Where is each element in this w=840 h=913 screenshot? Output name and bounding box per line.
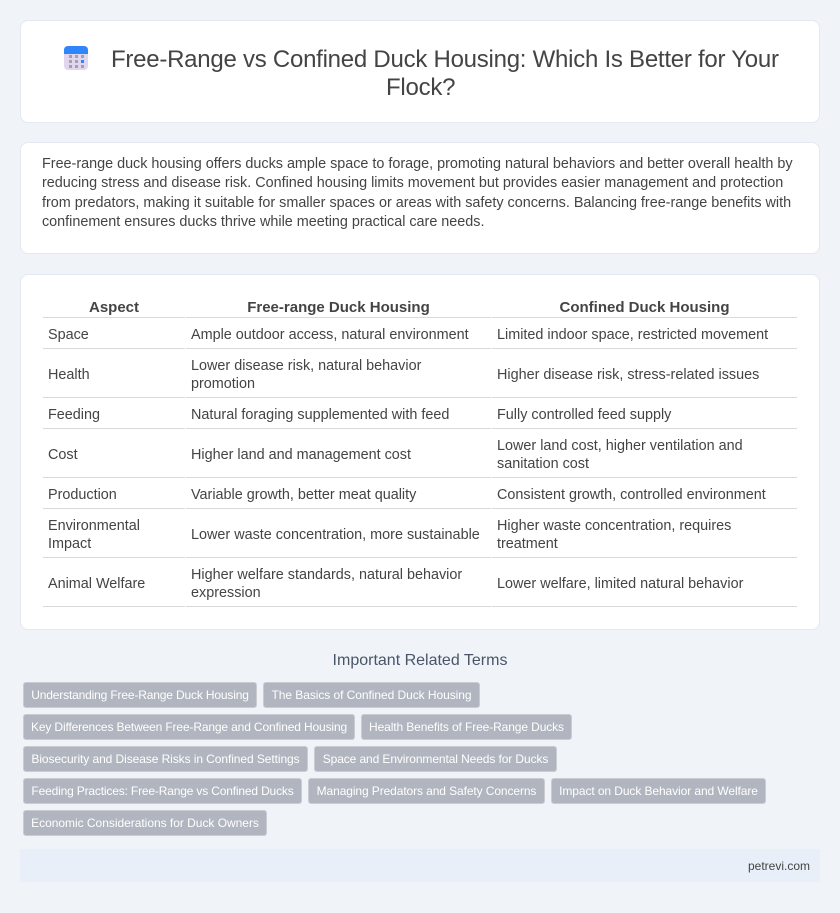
row: Animal Welfare: Animal Welfare: [48, 576, 145, 592]
tag: Economic Considerations for Duck Owners: [31, 816, 259, 830]
text block: intro paragraph: [42, 156, 793, 230]
tag: Understanding Free-Range Duck Housing: [31, 688, 249, 702]
row: Production: Consistent growth, controlled environment: [497, 487, 766, 503]
tag: [361, 714, 572, 740]
row: Environmental Impact: [48, 518, 731, 552]
tag: [23, 714, 355, 740]
row: Production: Variable growth, better meat quality: [191, 487, 416, 503]
tag: Impact on Duck Behavior and Welfare: [559, 784, 758, 798]
table: comparison: [43, 299, 797, 607]
title: [111, 46, 779, 101]
title: Flock?: [386, 74, 455, 101]
table header: Aspect: [89, 299, 139, 316]
tag: [551, 778, 766, 804]
title: Free-Range vs Confined Duck Housing: Which Is Better for Your: [111, 46, 779, 73]
row: Cost: Higher land and management cost: [191, 447, 411, 463]
row: Space: [48, 327, 768, 343]
tag: Managing Predators and Safety Concerns: [317, 784, 536, 798]
footer source: petrevi.com: [748, 859, 810, 873]
row: Animal Welfare: expression: [191, 585, 261, 601]
row: Environmental Impact: Environmental: [48, 518, 140, 534]
tag: Feeding Practices: Free-Range vs Confined Ducks: [31, 784, 294, 798]
row: Space: Limited indoor space, restricted movement: [497, 327, 768, 343]
tag list: related terms: [23, 682, 766, 836]
row: Cost: Lower land cost, higher ventilation and: [497, 438, 743, 454]
tag: [23, 682, 257, 708]
tag: Key Differences Between Free-Range and Confined Housing: [31, 720, 347, 734]
panel: comparison table: [20, 274, 820, 630]
row: Health: Higher disease risk, stress-related issues: [497, 367, 759, 383]
table header: Confined Duck Housing: [560, 299, 730, 316]
tag: The Basics of Confined Duck Housing: [271, 688, 472, 702]
text block: intro paragraph: from predators, making it suitable for smaller spaces or areas with safety concerns. Balancing free-range benefits with: [42, 195, 791, 211]
panel: title card: [20, 20, 820, 123]
text block: intro paragraph: reducing stress and disease risk. Confined housing limits movement but provides easier management and protection: [42, 175, 783, 191]
row: Environmental Impact: Impact: [48, 536, 91, 552]
row: Health: [48, 358, 759, 392]
row: Health: Lower disease risk, natural behavior: [191, 358, 421, 374]
tag: [308, 778, 545, 804]
tag: [23, 778, 302, 804]
row: Cost: [48, 438, 743, 472]
row: Cost: sanitation cost: [497, 456, 589, 472]
icon: calendar: [64, 46, 88, 70]
row: Health: promotion: [191, 376, 255, 392]
tag: Health Benefits of Free-Range Ducks: [369, 720, 564, 734]
row: Environmental Impact: Higher waste concentration, requires: [497, 518, 731, 534]
tag: [23, 810, 267, 836]
tag: [314, 746, 557, 772]
text block: intro paragraph: confinement ensures ducks thrive while meeting practical care needs.: [42, 214, 484, 230]
row: Feeding: Fully controlled feed supply: [497, 407, 671, 423]
row: Animal Welfare: [48, 567, 744, 601]
row: Animal Welfare: Lower welfare, limited natural behavior: [497, 576, 743, 592]
row: Production: Production: [48, 487, 117, 503]
tag: [23, 746, 308, 772]
text block: intro paragraph: Free-range duck housing offers ducks ample space to forage, promoting natural behaviors and better overall health by: [42, 156, 793, 172]
row: Production: [48, 487, 766, 503]
row: Health: Health: [48, 367, 90, 383]
row: Feeding: [48, 407, 672, 423]
tag: [263, 682, 480, 708]
row: Space: Ample outdoor access, natural environment: [191, 327, 469, 343]
tag: Biosecurity and Disease Risks in Confined Settings: [31, 752, 300, 766]
row: Environmental Impact: Lower waste concentration, more sustainable: [191, 527, 480, 543]
row: Environmental Impact: treatment: [497, 536, 558, 552]
row: Space: Space: [48, 327, 89, 343]
tag: Space and Environmental Needs for Ducks: [323, 752, 548, 766]
row: Cost: Cost: [48, 447, 78, 463]
panel: intro text: [20, 142, 820, 254]
footer: [20, 849, 820, 882]
row: Feeding: Natural foraging supplemented with feed: [191, 407, 449, 423]
row: Feeding: Feeding: [48, 407, 100, 423]
table header: [89, 299, 730, 316]
table header: Free-range Duck Housing: [247, 299, 430, 316]
row: Animal Welfare: Higher welfare standards, natural behavior: [191, 567, 462, 583]
heading: related terms: Important Related Terms: [333, 652, 507, 669]
